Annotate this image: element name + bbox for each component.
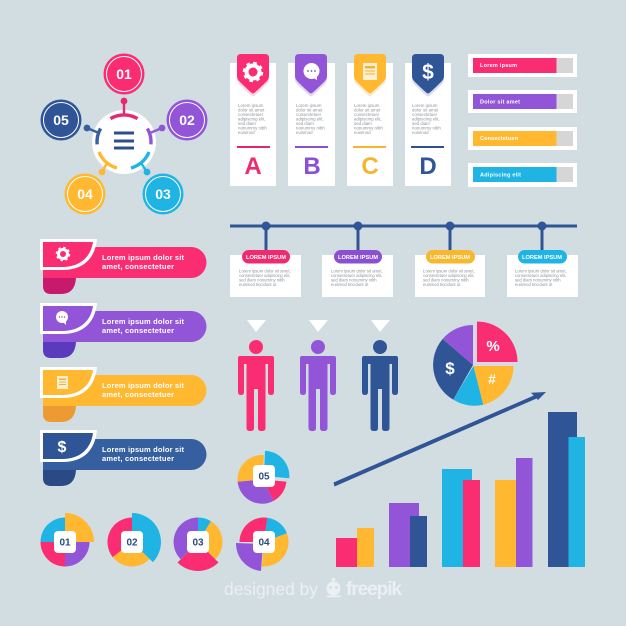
- card D: euismod: [412, 130, 429, 135]
- card A: consectetuer: [238, 112, 264, 117]
- step 03: [142, 174, 184, 214]
- timeline card 4: sed diam nonummy nibh: [515, 278, 561, 282]
- card D: D: [419, 153, 437, 180]
- timeline card 1: consectetuer adipiscing elit,: [239, 273, 290, 278]
- card A: [230, 54, 276, 186]
- banner: pink: [40, 239, 206, 294]
- step 02: 02: [179, 112, 195, 128]
- panel: labelled progress bars: [468, 54, 577, 187]
- bar group 1: [336, 528, 374, 567]
- card B: sed diam: [296, 121, 314, 126]
- watermark: [224, 578, 402, 600]
- icon: menu lines: [114, 132, 134, 150]
- card A: adipiscing elit,: [238, 116, 266, 122]
- step 01: [104, 54, 144, 94]
- banner: yellow: amet, consectetuer: [102, 390, 174, 399]
- timeline card 1: sed diam nonummy nibh: [239, 278, 285, 282]
- card C: nonummy nibh: [354, 126, 383, 130]
- panel: donut chart 01: 01: [59, 538, 71, 548]
- timeline card 1: Lorem ipsum dolor sit amet,: [239, 268, 291, 274]
- timeline card 4: Lorem ipsum dolor sit amet,: [515, 268, 567, 274]
- card D: nonummy nibh: [412, 126, 441, 130]
- banner: navy: [40, 430, 206, 486]
- icon: purple person: [300, 340, 336, 431]
- timeline axis: [230, 222, 577, 251]
- bar: Consectetuen: Consectetuen: [480, 136, 519, 142]
- card A: sed diam: [238, 121, 256, 126]
- hub diagram: five numbered steps: [40, 54, 208, 214]
- timeline card 4: [507, 250, 578, 297]
- banner: yellow: Lorem ipsum dolor sit: [102, 381, 184, 390]
- step 05: [40, 100, 82, 140]
- bar group 2: [389, 503, 427, 567]
- banner: purple: [40, 303, 206, 358]
- step 02: [166, 100, 208, 140]
- banner: purple: amet, consectetuer: [102, 326, 174, 335]
- pie chart: $: [445, 359, 455, 378]
- card B: dolor sit amet: [296, 108, 323, 112]
- timeline card 2: consectetuer adipiscing elit,: [331, 273, 382, 278]
- panel: people icons: [238, 320, 398, 431]
- card D: $: [422, 61, 434, 84]
- card B: Lorem ipsum: [296, 103, 322, 108]
- arrow: upward trend: [334, 392, 546, 486]
- card A: nonummy nibh: [238, 126, 267, 130]
- panel: ribbon banners: [40, 239, 206, 486]
- card D: Lorem ipsum: [412, 103, 438, 108]
- timeline card 4: LOREM IPSUM: [522, 255, 562, 261]
- card D: [405, 54, 451, 186]
- pie chart: #: [488, 371, 496, 387]
- bar group 4: [495, 458, 532, 567]
- card B: nonummy nibh: [296, 126, 325, 130]
- panel: donut chart 03: [174, 517, 222, 571]
- card B: [288, 54, 335, 186]
- step 05: 05: [53, 112, 69, 128]
- timeline card 1: euismod tincidunt ut: [239, 282, 277, 287]
- card A: A: [244, 153, 262, 180]
- timeline card 1: [230, 250, 301, 297]
- timeline card 2: sed diam nonummy nibh: [331, 278, 377, 282]
- bar chart: [336, 412, 585, 567]
- panel: donut chart 02: 02: [126, 538, 138, 548]
- icon: pink person: [238, 340, 274, 431]
- card A: dolor sit amet: [238, 108, 265, 112]
- pie chart: %: [486, 338, 500, 355]
- step 03: 03: [155, 186, 171, 202]
- timeline card 3: [415, 250, 485, 297]
- panel: donut chart 03: 03: [192, 538, 204, 548]
- timeline card 3: LOREM IPSUM: [430, 255, 470, 261]
- banner: navy: Lorem ipsum dolor sit: [102, 445, 184, 454]
- card D: consectetuer: [412, 112, 438, 117]
- bar group 5: [548, 412, 585, 567]
- card D: adipiscing elit,: [412, 116, 440, 122]
- timeline card 2: [322, 250, 393, 297]
- timeline: [230, 222, 578, 297]
- card A: Lorem ipsum: [238, 103, 264, 108]
- banner: navy: $: [58, 439, 67, 456]
- timeline card 4: consectetuer adipiscing elit,: [515, 273, 566, 278]
- card C: dolor sit amet: [354, 108, 381, 112]
- banner: yellow: [40, 367, 206, 422]
- panel: donut chart 05: [238, 451, 289, 504]
- panel: donut chart 05: 05: [258, 472, 270, 482]
- card D: sed diam: [412, 121, 430, 126]
- timeline card 1: LOREM IPSUM: [246, 255, 286, 261]
- card C: C: [361, 153, 379, 180]
- panel: donut chart 04: 04: [258, 538, 270, 548]
- banner: purple: Lorem ipsum dolor sit: [102, 317, 184, 326]
- panel: four lettered cards: [230, 54, 451, 186]
- marker triangles: [247, 320, 390, 332]
- timeline card 3: euismod tincidunt ut: [423, 282, 461, 287]
- timeline card 3: sed diam nonummy nibh: [423, 278, 469, 282]
- banner: pink: Lorem ipsum dolor sit: [102, 253, 184, 262]
- card C: adipiscing elit,: [354, 116, 382, 122]
- watermark: freepik: [346, 579, 402, 600]
- card C: [347, 54, 393, 186]
- bar: Dolor sit amet: Dolor sit amet: [480, 100, 520, 106]
- bar: Lorem ipsum: Lorem ipsum: [480, 63, 517, 69]
- step 01: 01: [116, 66, 132, 82]
- timeline card 4: euismod tincidunt ut: [515, 282, 553, 287]
- card B: B: [303, 153, 321, 180]
- watermark: designed by: [224, 579, 318, 599]
- step 04: 04: [77, 186, 93, 202]
- panel: donut chart 04: [236, 517, 289, 571]
- bar: Adipiscing elit: Adipiscing elit: [480, 172, 521, 178]
- card C: sed diam: [354, 121, 372, 126]
- hub centre circle: [84, 98, 165, 175]
- card C: Lorem ipsum: [354, 103, 380, 108]
- timeline card 2: euismod tincidunt ut: [331, 282, 369, 287]
- bar group 3: [442, 469, 480, 567]
- timeline card 3: consectetuer adipiscing elit,: [423, 273, 474, 278]
- panel: donut chart 01: [40, 513, 94, 566]
- timeline card 2: Lorem ipsum dolor sit amet,: [331, 268, 383, 274]
- card A: euismod: [238, 130, 255, 135]
- card B: adipiscing elit,: [296, 116, 324, 122]
- icon: freepik logo: [326, 578, 341, 597]
- timeline card 3: Lorem ipsum dolor sit amet,: [423, 268, 475, 274]
- banner: pink: amet, consectetuer: [102, 262, 174, 271]
- card B: consectetuer: [296, 112, 322, 117]
- card B: euismod: [296, 130, 313, 135]
- pie chart: [433, 322, 518, 406]
- card D: dolor sit amet: [412, 108, 439, 112]
- icon: navy person: [362, 340, 398, 431]
- card C: consectetuer: [354, 112, 380, 117]
- panel: donut chart 02: [107, 513, 161, 566]
- banner: navy: amet, consectetuer: [102, 454, 174, 463]
- card C: euismod: [354, 130, 371, 135]
- step 04: [64, 174, 106, 214]
- timeline card 2: LOREM IPSUM: [338, 255, 378, 261]
